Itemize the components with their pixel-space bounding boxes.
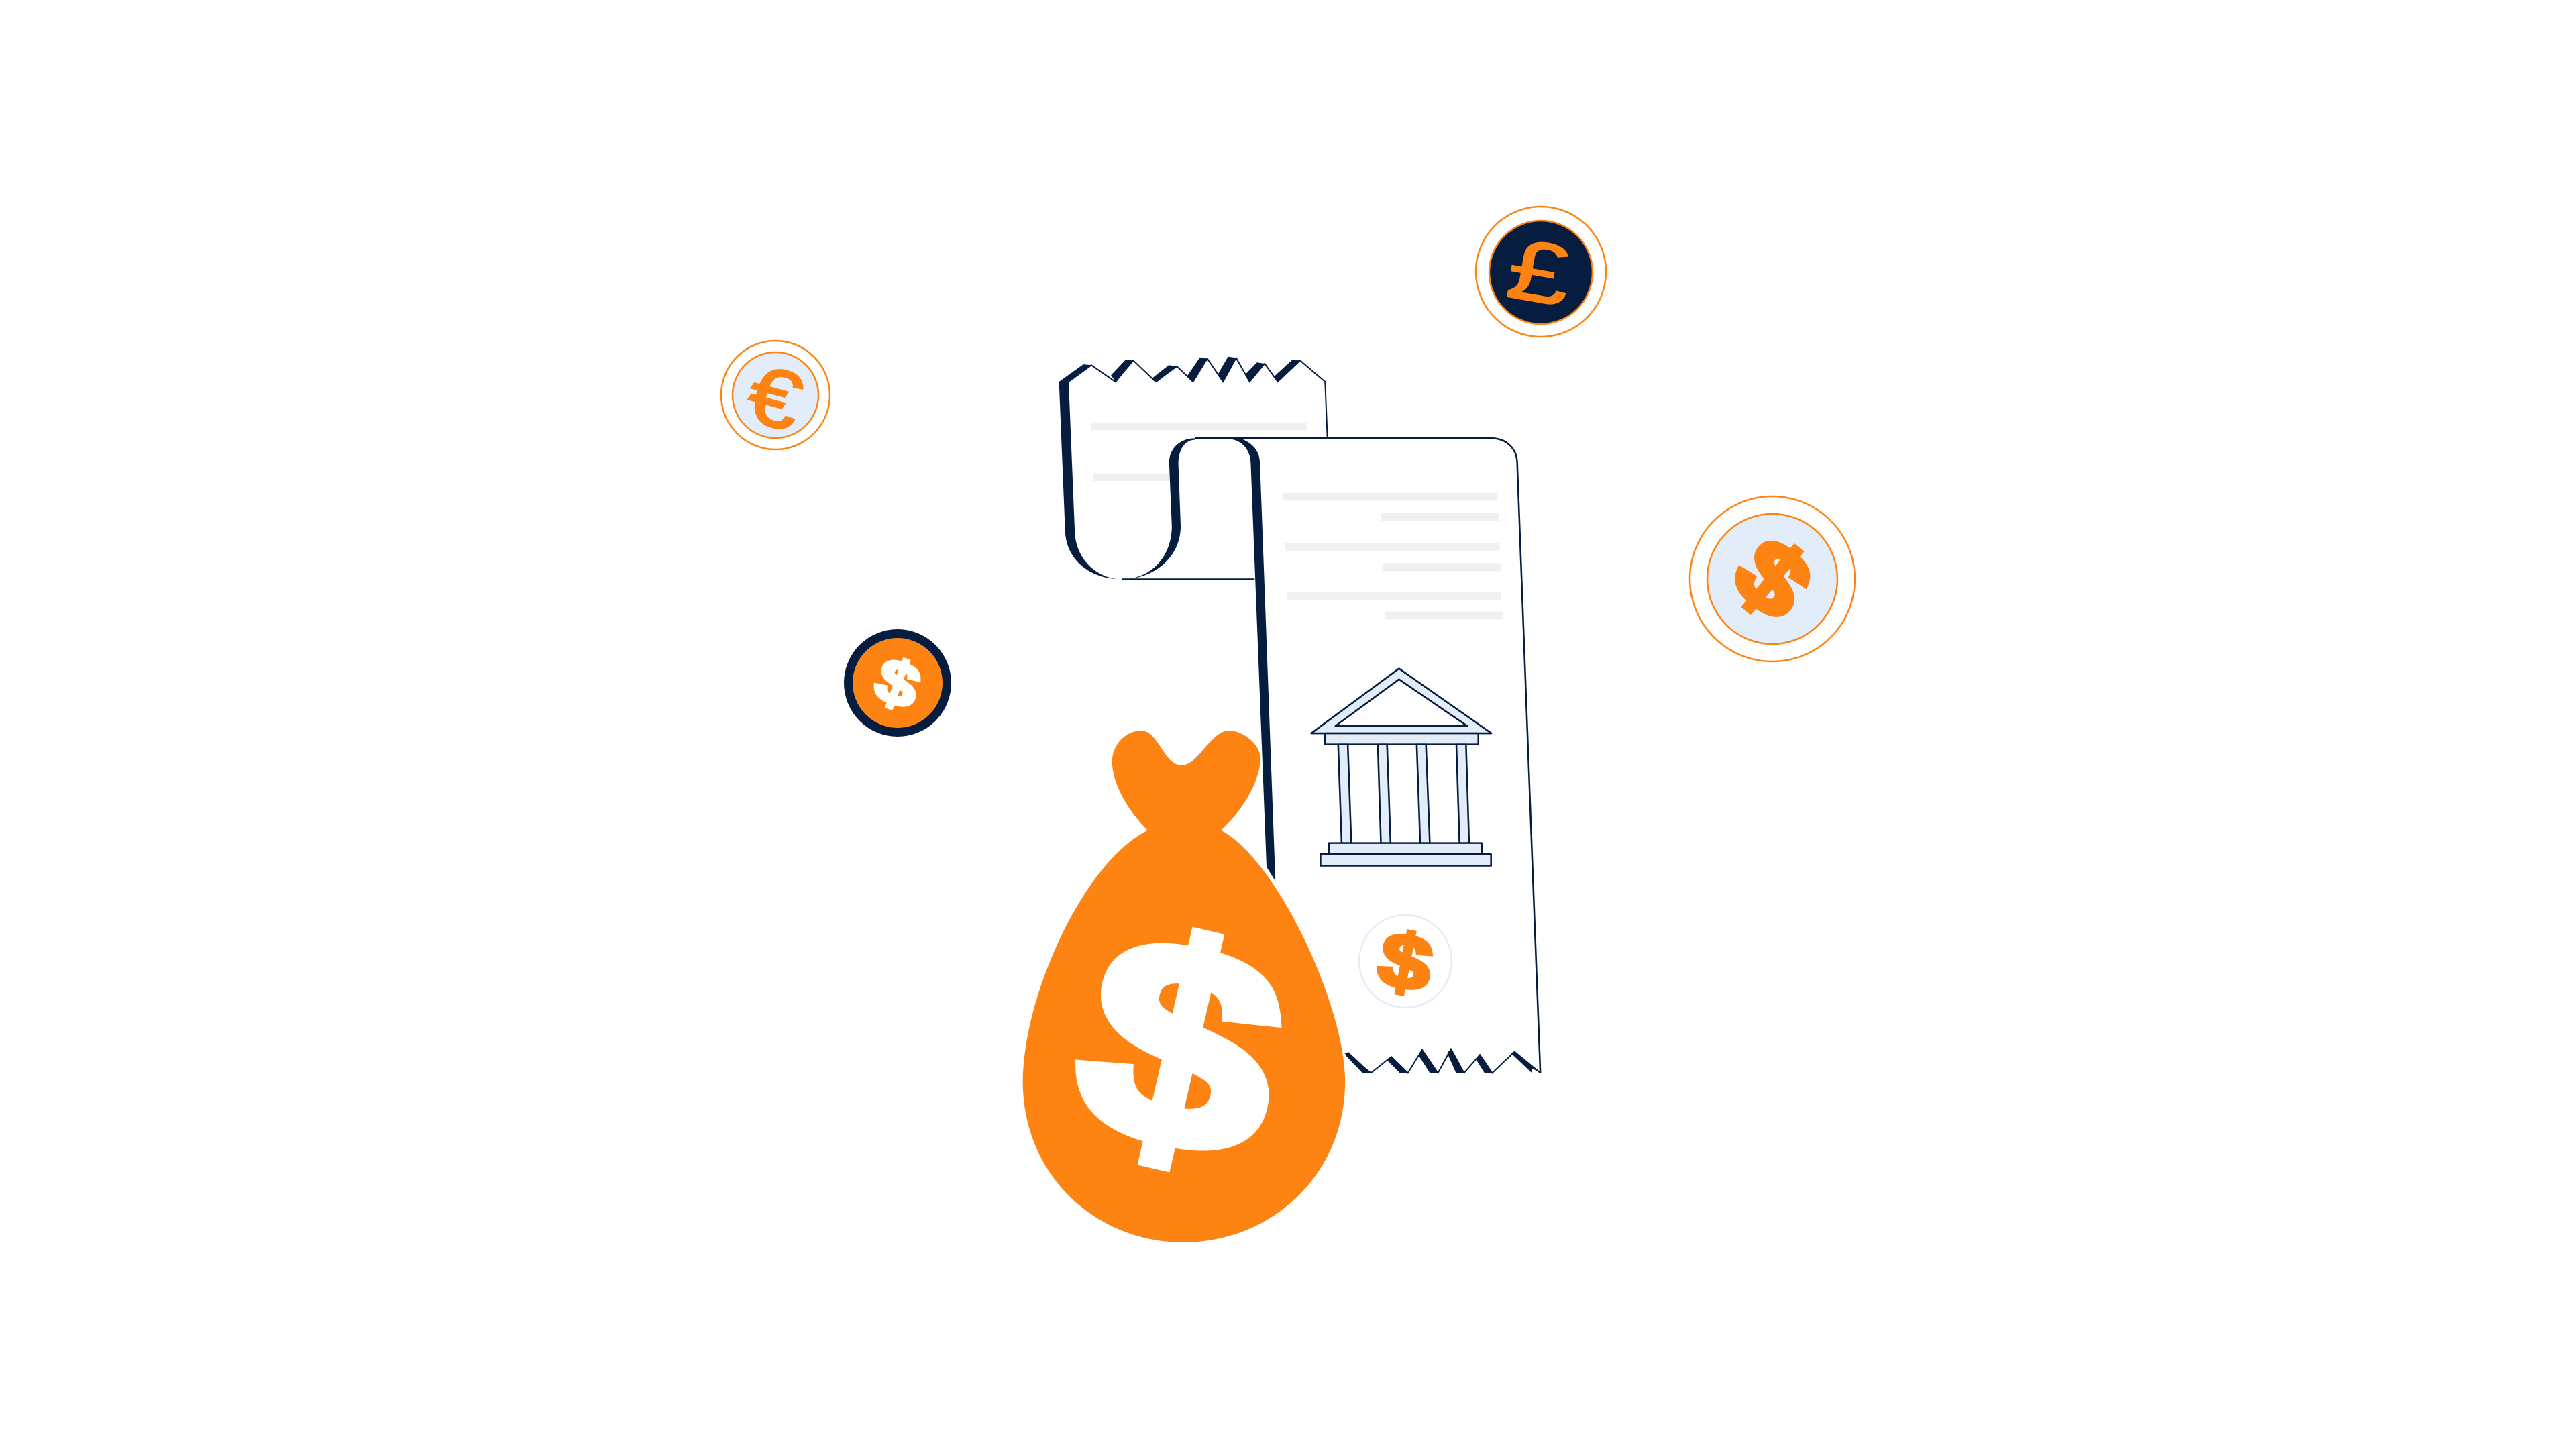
coin: receipt dollar: $ — [1372, 915, 1439, 1008]
coin: pound — [1476, 207, 1606, 337]
money bag — [1023, 731, 1345, 1242]
coin: large dollar — [1690, 496, 1855, 661]
front sheet — [1195, 438, 1540, 1073]
curl of paper roll — [1122, 438, 1195, 579]
icon: bank building — [1311, 669, 1491, 865]
coin: orange dollar: $ — [866, 643, 929, 722]
coin: large dollar: $ — [1714, 517, 1832, 640]
bag dollar sign: $ — [1052, 869, 1310, 1222]
coin: euro: € — [738, 347, 811, 449]
coin: euro — [721, 341, 830, 449]
back sheet — [1059, 357, 1328, 579]
receipt — [1059, 357, 1540, 1073]
coin: orange dollar — [848, 633, 947, 733]
torn bottom edge — [1345, 1049, 1540, 1073]
coin: pound: £ — [1501, 220, 1578, 325]
